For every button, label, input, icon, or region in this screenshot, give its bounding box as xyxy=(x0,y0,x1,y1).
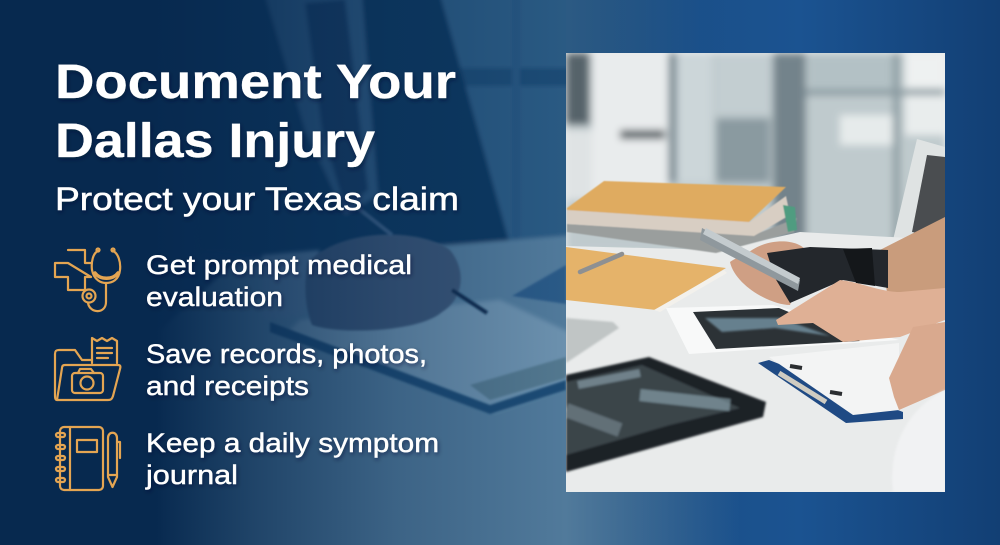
hand holding pen xyxy=(305,208,487,331)
text: records xyxy=(146,339,427,401)
table surface xyxy=(566,232,902,256)
arm with wrist brace and phone xyxy=(700,217,945,305)
title: Document Your xyxy=(55,56,456,109)
icon: folder with camera and receipt xyxy=(55,338,120,400)
text: medical evaluation: Get prompt medical xyxy=(146,250,412,280)
icon: spiral notebook and pen xyxy=(56,427,120,490)
title xyxy=(55,56,456,168)
title: Dallas Injury xyxy=(55,115,375,168)
text: records: and receipts xyxy=(146,371,309,401)
orange folder with pen xyxy=(566,247,727,312)
clasped hands and white sleeve xyxy=(889,322,945,410)
text: medical evaluation: evaluation xyxy=(146,282,283,312)
monitor xyxy=(893,139,945,240)
subtitle: Protect your Texas claim xyxy=(55,181,459,217)
folder stack xyxy=(567,181,797,253)
laptop corner xyxy=(566,318,619,363)
text: medical evaluation xyxy=(146,250,412,312)
photo: medical documents on desk xyxy=(566,53,945,492)
text: symptom journal: journal xyxy=(145,460,238,490)
icon: medical cross and stethoscope xyxy=(55,248,120,311)
checklist item: records xyxy=(55,338,427,401)
checklist item: medical evaluation xyxy=(55,248,412,312)
clipboard xyxy=(758,343,903,423)
blurred office window background xyxy=(566,53,945,253)
pointing hand xyxy=(776,280,945,342)
checklist item: symptom journal xyxy=(56,427,439,490)
clipboard edge xyxy=(270,322,566,414)
text: symptom journal: Keep a daily symptom xyxy=(146,428,439,458)
text: records: Save records, photos, xyxy=(146,339,427,369)
tablet xyxy=(566,357,766,472)
x-ray sheet xyxy=(666,305,899,354)
text: symptom journal xyxy=(145,428,439,490)
